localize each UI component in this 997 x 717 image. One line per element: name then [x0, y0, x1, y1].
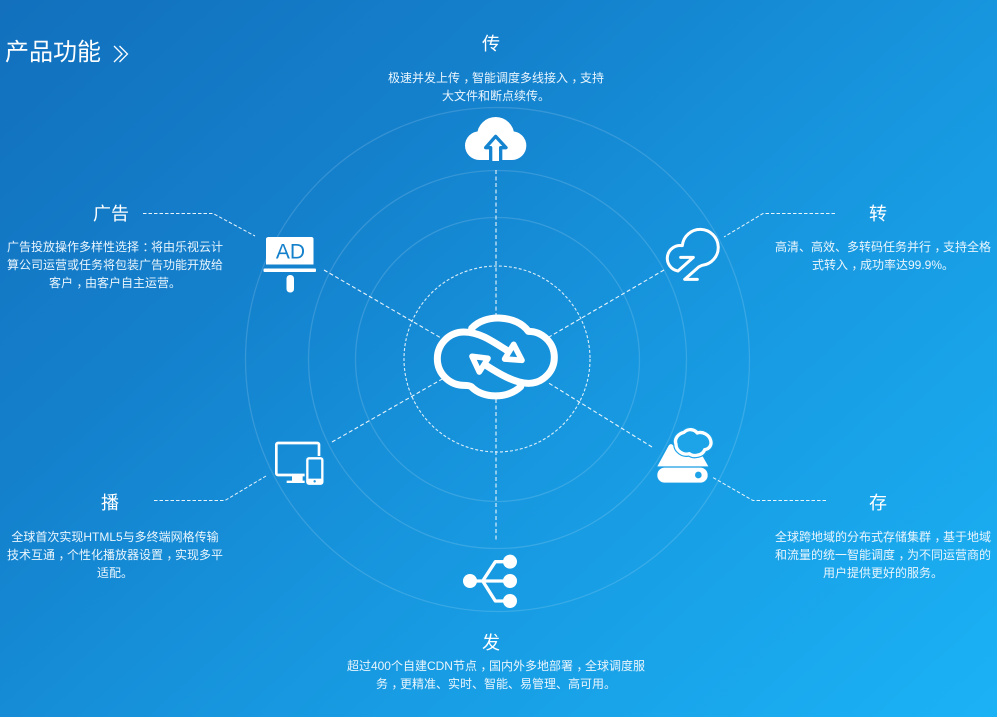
icon: advertising board: AD	[276, 240, 305, 264]
icon: title chevrons	[114, 46, 128, 62]
icon: transcode cloud	[667, 229, 718, 279]
text: 转 description: 高清、高效、多转码任务并行 ，支持全格	[775, 240, 991, 254]
text: 发 description: 务 ，更精准、实时、智能、易管理、高可用。	[376, 677, 616, 691]
text: 广告 description: 客户 ，由客户自主运营。	[49, 276, 181, 290]
text: 存 description: 和流量的统一智能调度 ，为不同运营商的	[775, 548, 991, 562]
heading: 存: 存	[869, 493, 887, 513]
heading: 传: 传	[482, 34, 500, 54]
concentric rings	[246, 108, 750, 612]
text: 播 description: 技术互通 ，个性化播放器设置 ，实现多平	[7, 548, 223, 562]
heading: 转: 转	[869, 204, 887, 224]
text: 传 description	[388, 71, 604, 103]
text: 存 description: 全球跨地域的分布式存储集群 ，基于地域	[775, 530, 991, 544]
text: 播 description: 适配。	[97, 566, 133, 580]
icon: cloud storage disk	[657, 430, 711, 483]
text: 转 description	[775, 240, 991, 272]
text: 存 description: 用户提供更好的服务。	[823, 566, 943, 580]
panel: 转	[775, 204, 991, 272]
text: 广告 description	[7, 240, 223, 290]
icon: distribution tree	[463, 555, 517, 608]
text: 播 description: 全球首次实现HTML5与多终端网格传输	[11, 530, 219, 544]
text: 发 description	[347, 659, 645, 691]
text: 存 description	[775, 530, 991, 580]
dashed spokes	[324, 170, 664, 542]
panel: 播	[7, 493, 223, 580]
panel: 广告	[7, 204, 223, 290]
title: 产品功能	[5, 39, 101, 66]
text: 广告 description: 广告投放操作多样性选择 ：将由乐视云计	[7, 240, 223, 254]
panel: 存	[775, 493, 991, 580]
text: 广告 description: 算公司运营或任务将包装广告功能开放给	[7, 258, 223, 272]
heading: 播: 播	[101, 493, 119, 513]
text: 发 description: 超过400个自建CDN节点 ，国内外多地部署 ，全球调度服	[347, 659, 645, 673]
icon: multi-device screens	[276, 443, 325, 486]
text: 播 description	[7, 530, 223, 580]
heading: 发: 发	[482, 633, 500, 653]
icon: central cloud with cycle arrows	[437, 318, 554, 396]
icon: upload cloud	[465, 117, 526, 161]
heading: 广告: 广告	[93, 204, 129, 224]
panel: 传	[388, 34, 604, 103]
panel: 发	[347, 633, 645, 691]
text: 传 description: 大文件和断点续传。	[442, 89, 550, 103]
dashed leader lines	[143, 214, 835, 500]
text: 转 description: 式转入 ，成功率达99.9%。	[812, 258, 954, 272]
icon: advertising board	[264, 237, 316, 292]
text: 传 description: 极速并发上传 ，智能调度多线接入 ，支持	[388, 71, 604, 85]
